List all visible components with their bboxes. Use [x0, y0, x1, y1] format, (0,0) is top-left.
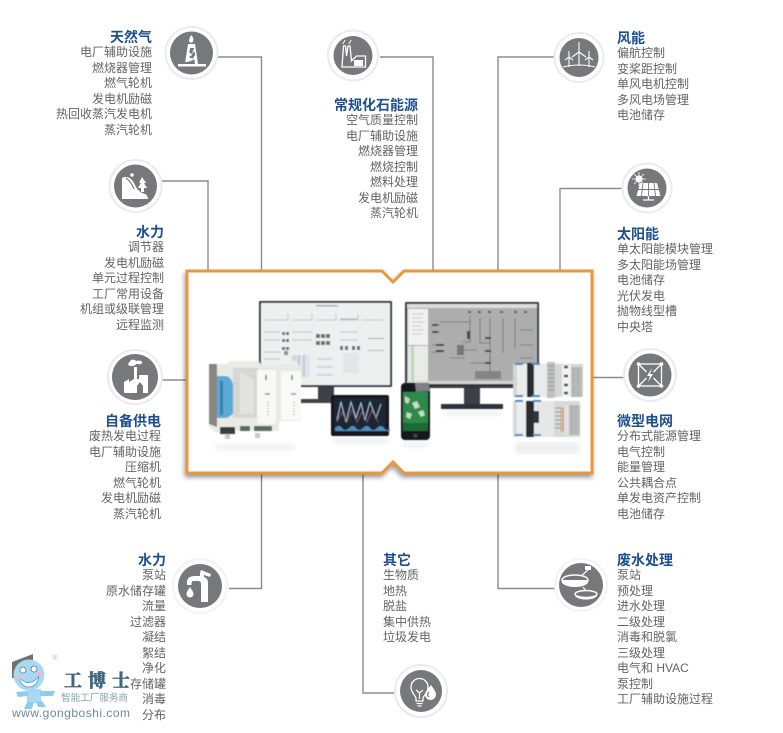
text block: natural gas: 电厂辅助设施 [80, 45, 152, 59]
text block: wind [617, 30, 689, 122]
text block: wind: 多风电场管理 [617, 92, 689, 106]
text block: hydro: 单元过程控制 [92, 271, 164, 285]
text block: solar: 单太阳能模块管理 [617, 242, 713, 256]
text block: self generation: 蒸汽轮机 [113, 506, 161, 520]
text block: conventional fossil energy: 发电机励磁 [358, 190, 418, 204]
icon: microgrid [624, 349, 676, 401]
floor reflections [215, 411, 580, 454]
text block: solar: 电池储存 [617, 273, 665, 287]
text block: wastewater: 电气和 HVAC [617, 661, 689, 675]
text block: water: 存储罐 [130, 676, 166, 690]
text block: wastewater: 工厂辅助设施过程 [617, 692, 713, 706]
text block: natural gas: 发电机励磁 [92, 92, 152, 106]
text block: wind: 电池储存 [617, 108, 665, 122]
text block: wastewater [617, 552, 713, 706]
text block: other: 垃圾发电 [383, 630, 431, 644]
icon: self generation factory [108, 350, 162, 404]
text block: hydro: 水力 [136, 224, 164, 240]
text block: natural gas: 蒸汽轮机 [104, 122, 152, 136]
logo name: 工博士 [64, 670, 136, 691]
text block: natural gas: 燃气轮机 [104, 76, 152, 90]
text block: wastewater: 三级处理 [617, 646, 665, 660]
icon: wastewater tanks [555, 559, 607, 611]
text block: microgrid: 电池储存 [617, 506, 665, 520]
text block: microgrid: 能量管理 [617, 460, 665, 474]
text block: solar: 太阳能 [617, 226, 659, 242]
controller device right [513, 362, 583, 437]
text block: water: 水力 [138, 552, 166, 568]
text block: solar: 光伏发电 [617, 288, 665, 302]
text block: hydro [80, 224, 164, 332]
text block: wastewater: 泵站 [617, 568, 641, 582]
text block: microgrid: 微型电网 [617, 413, 673, 429]
controller device left [209, 361, 301, 439]
text block: wind: 单风电机控制 [617, 77, 689, 91]
icon: hydro dam [110, 160, 162, 212]
right monitor [405, 302, 539, 409]
text block: water: 流量 [142, 599, 166, 613]
icon: faucet [173, 559, 227, 613]
text block: hydro: 工厂常用设备 [92, 286, 164, 300]
text block: self generation: 燃气轮机 [113, 476, 161, 490]
text block: hydro: 调节器 [128, 240, 164, 254]
icon: conventional fossil plant [328, 30, 378, 80]
icon: wind turbines [554, 33, 604, 82]
text block: microgrid: 单发电资产控制 [617, 491, 701, 505]
text block: microgrid: 分布式能源管理 [617, 429, 701, 443]
text block: other: 集中供热 [383, 614, 431, 628]
text block: conventional fossil energy: 空气质量控制 [346, 113, 418, 127]
text block: water: 消毒 [142, 692, 166, 706]
text block: hydro: 远程监测 [116, 318, 164, 332]
text block: microgrid [617, 413, 701, 520]
text block: conventional fossil energy [334, 97, 418, 220]
text block: water [106, 552, 166, 722]
text block: natural gas: 热回收蒸汽发电机 [56, 107, 152, 121]
text block: conventional fossil energy: 蒸汽轮机 [370, 206, 418, 220]
text block: water: 净化 [142, 661, 166, 675]
mascot: ® [52, 654, 58, 662]
text block: wastewater: 废水处理 [617, 552, 673, 568]
panel: central product frame [187, 271, 592, 473]
text block: water: 过滤器 [130, 614, 166, 628]
text block: wastewater: 二级处理 [617, 614, 665, 628]
text block: wind: 偏航控制 [617, 46, 665, 60]
text block: conventional fossil energy: 电厂辅助设施 [346, 128, 418, 142]
left monitor [259, 301, 392, 403]
text block: wastewater: 消毒和脱氯 [617, 630, 677, 644]
text block: other: 生物质 [383, 568, 419, 582]
smartphone [401, 383, 430, 440]
text block: solar: 中央塔 [617, 320, 653, 334]
text block: microgrid: 公共耦合点 [617, 476, 677, 490]
text block: other: 脱盐 [383, 599, 407, 613]
text block: solar [617, 226, 713, 334]
text block: wastewater: 进水处理 [617, 599, 665, 613]
text block: water: 原水储存罐 [106, 584, 166, 598]
icon: solar panel [622, 164, 672, 212]
text block: natural gas [56, 29, 152, 136]
text block: other: 其它 [383, 552, 411, 568]
text block: conventional fossil energy: 燃烧器管理 [358, 144, 418, 158]
logo website: www.gongboshi.com [11, 706, 130, 720]
text block: self generation: 发电机励磁 [101, 491, 161, 505]
text block: other: 地热 [383, 584, 407, 598]
text block: self generation: 电厂辅助设施 [89, 444, 161, 458]
text block: wastewater: 泵控制 [617, 676, 653, 690]
text block: water: 凝结 [142, 630, 166, 644]
text block: water: 絮结 [142, 646, 166, 660]
text block: hydro: 发电机励磁 [104, 256, 164, 270]
text block: wind: 变桨距控制 [617, 62, 677, 76]
logo tagline: 智能工厂服务商 [61, 692, 129, 704]
text block: self generation: 自备供电 [105, 413, 161, 429]
text block: solar: 抛物线型槽 [617, 304, 677, 318]
text block: conventional fossil energy: 燃烧控制 [370, 160, 418, 174]
text block: hydro: 机组或级联管理 [80, 302, 164, 316]
text block: wastewater: 预处理 [617, 584, 653, 598]
text block: conventional fossil energy: 燃料处理 [370, 175, 418, 189]
text block: other [383, 552, 431, 644]
text block: natural gas: 天然气 [110, 29, 152, 45]
text block: natural gas: 燃烧器管理 [92, 60, 152, 74]
text block: water: 分布 [142, 708, 166, 722]
text block: self generation: 废热发电过程 [89, 429, 161, 443]
connector lines [162, 57, 624, 693]
text block: wind: 风能 [617, 30, 645, 46]
tablet [331, 395, 390, 436]
icon: natural gas derrick [166, 27, 218, 79]
text block: self generation: 压缩机 [125, 460, 161, 474]
icon: bulb and water drop [395, 665, 447, 717]
text block: self generation [89, 413, 161, 520]
text block: solar: 多太阳能场管理 [617, 258, 701, 272]
text block: conventional fossil energy: 常规化石能源 [334, 97, 418, 113]
text block: water: 泵站 [142, 568, 166, 582]
text block: microgrid: 电气控制 [617, 444, 665, 458]
